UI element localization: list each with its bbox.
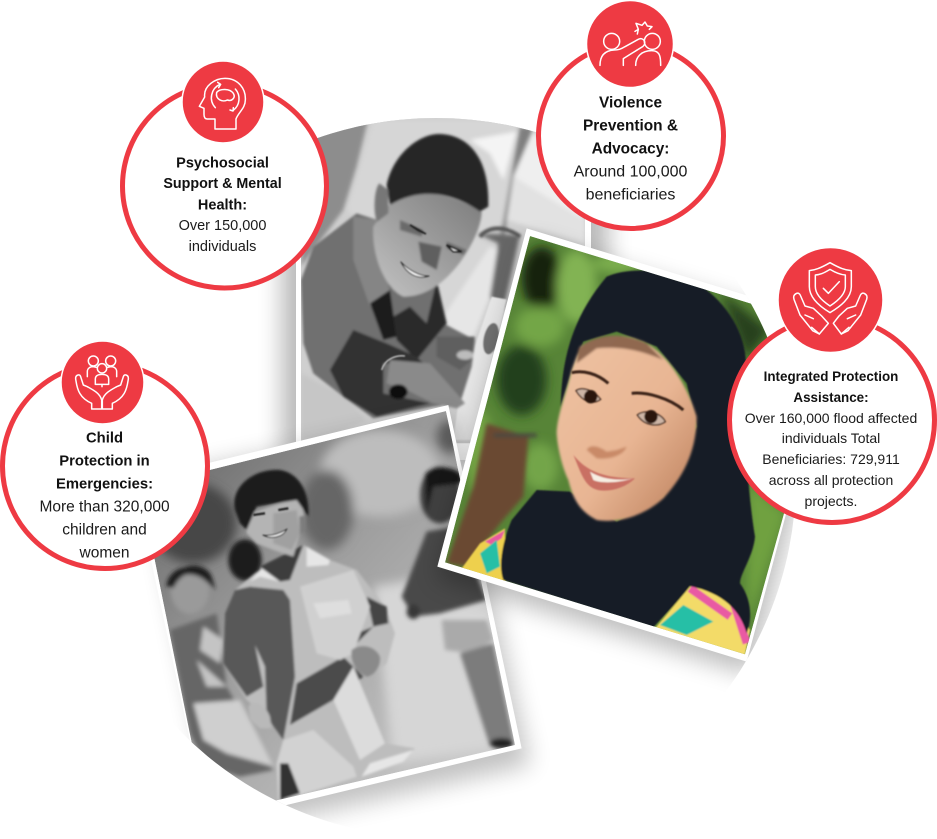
text: integrated protection: projects. xyxy=(805,493,857,509)
text: psychosocial support: Over 150,000 xyxy=(179,218,266,234)
callout: psychosocial support xyxy=(122,61,326,288)
text: integrated protection: across all protection xyxy=(769,472,893,488)
icon: shield in two hands xyxy=(778,248,883,352)
callout: integrated protection xyxy=(730,248,934,522)
photo: smiling girl in dark headscarf (colour) xyxy=(437,228,794,682)
text: violence prevention: Around 100,000 xyxy=(574,164,688,180)
photo collage clipped to a circle xyxy=(154,118,794,822)
text: violence prevention: Violence xyxy=(599,94,662,112)
text: integrated protection: Over 160,000 flood affected xyxy=(745,410,917,426)
text: child protection: Emergencies: xyxy=(56,476,153,492)
text: child protection: Child xyxy=(86,430,123,446)
text: integrated protection: Beneficiaries: 729,911 xyxy=(762,451,900,467)
text: integrated protection: Integrated Protection xyxy=(764,369,898,384)
text: psychosocial support: Health: xyxy=(198,198,247,214)
icon: person striking another xyxy=(586,0,674,88)
text: child protection: women xyxy=(79,544,129,562)
text: integrated protection: Assistance: xyxy=(793,390,869,405)
callout: child protection xyxy=(2,341,208,568)
text: child protection: More than 320,000 xyxy=(39,498,170,516)
text: integrated protection: individuals Total xyxy=(782,430,880,446)
text: child protection: children and xyxy=(62,522,147,538)
text: violence prevention: Advocacy: xyxy=(592,140,669,158)
photo: boy running (black and white) xyxy=(134,405,530,835)
icon: head with brain xyxy=(182,61,264,143)
text: violence prevention: Prevention & xyxy=(583,118,678,134)
icon: family in two hands xyxy=(61,341,144,424)
text: psychosocial support: Psychosocial xyxy=(176,156,269,172)
callout: violence prevention xyxy=(538,0,724,228)
text: psychosocial support: Support & Mental xyxy=(163,176,282,192)
text: child protection: Protection in xyxy=(59,454,150,470)
text: violence prevention: beneficiaries xyxy=(586,186,675,204)
photo: boy looking up (black and white) xyxy=(282,100,608,460)
text: psychosocial support: individuals xyxy=(189,239,256,255)
